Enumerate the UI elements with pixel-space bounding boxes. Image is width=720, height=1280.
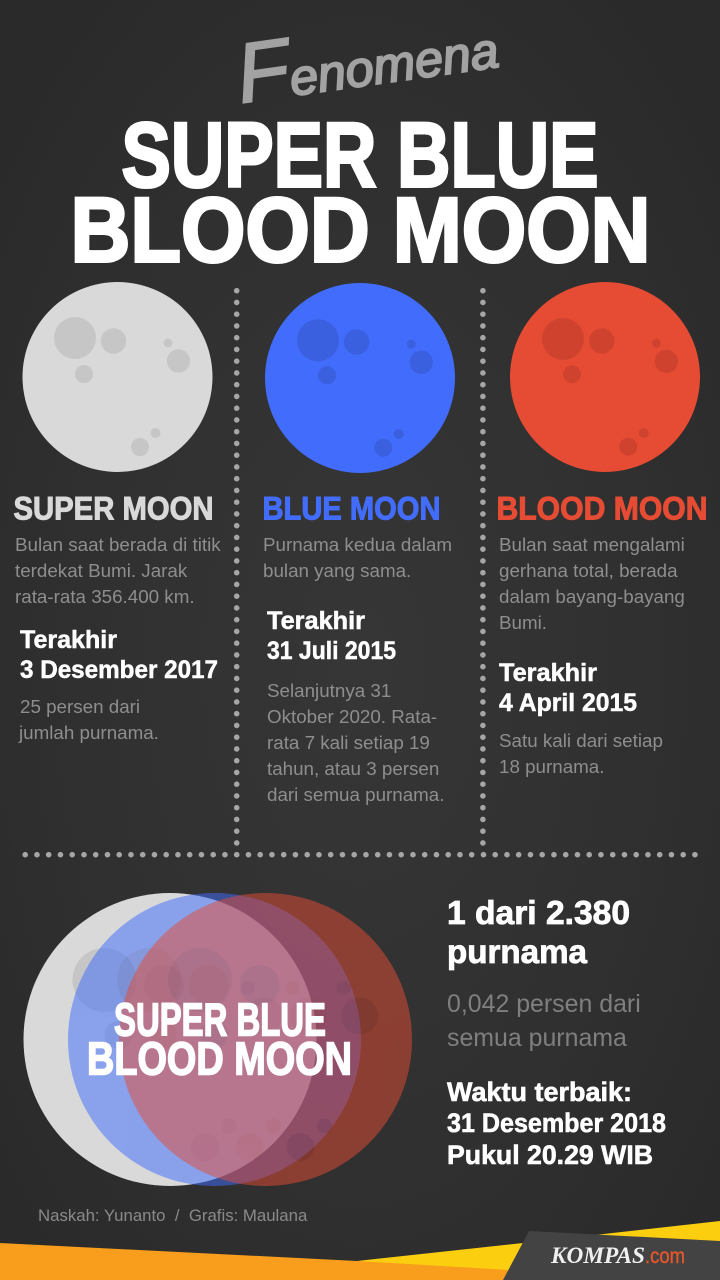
description: blue moon: bulan yang sama. (263, 560, 411, 581)
description: blood moon: gerhana total, berada (499, 560, 678, 581)
note: blood moon: Satu kali dari setiap (499, 730, 663, 751)
note: blue moon: rata 7 kali setiap 19 (267, 732, 430, 753)
credits: Naskah: Yunanto / Grafis: Maulana (38, 1206, 308, 1225)
last occurrence: blue moon: 31 Juli 2015 (267, 637, 396, 665)
text: percentage (447, 990, 641, 1052)
label: super blue blood moon: SUPER BLUE (114, 994, 326, 1046)
text: best time: Pukul 20.29 WIB (447, 1140, 653, 1170)
note: blood moon: 18 purnama. (499, 756, 604, 777)
last occurrence: super moon: Terakhir (20, 626, 117, 654)
heading: super moon: SUPER MOON (14, 490, 214, 526)
icon: super moon (22, 282, 212, 472)
description: blue moon (263, 534, 452, 581)
dotted dividers (25, 291, 698, 855)
description: blood moon (499, 534, 685, 633)
text: percentage: semua purnama (447, 1024, 627, 1052)
heading: blood moon: BLOOD MOON (496, 490, 708, 526)
icon: blood moon (510, 282, 700, 472)
logo: Kompas.com: KOMPAS (550, 1243, 645, 1268)
label: super blue blood moon: BLOOD MOON (87, 1032, 352, 1084)
text: best time: 31 Desember 2018 (447, 1108, 666, 1138)
note: blue moon: tahun, atau 3 persen (267, 758, 439, 779)
note: blue moon (267, 680, 444, 805)
last occurrence: blood moon: Terakhir (499, 659, 597, 687)
description: super moon: terdekat Bumi. Jarak (15, 560, 188, 581)
last occurrence: super moon: 3 Desember 2017 (20, 656, 218, 684)
panel: blood moon (496, 490, 708, 777)
note: blue moon: Selanjutnya 31 (267, 680, 391, 701)
text: best time: Waktu terbaik: (447, 1077, 632, 1107)
last occurrence: blood moon (499, 659, 637, 717)
note: super moon: 25 persen dari (20, 696, 140, 717)
chart: overlapping moons (24, 893, 412, 1186)
last occurrence: blood moon: 4 April 2015 (499, 689, 637, 717)
title (70, 104, 650, 282)
stat: rarity: purnama (447, 933, 588, 970)
title kicker: Fenomena: Fenomena (230, 0, 503, 121)
last occurrence: blue moon: Terakhir (267, 607, 365, 635)
overlap: red moon (119, 893, 412, 1186)
note: super moon (18, 696, 159, 743)
note: blue moon: Oktober 2020. Rata- (267, 706, 437, 727)
panel: super moon (14, 490, 221, 743)
stat: rarity (447, 894, 630, 970)
description: super moon: Bulan saat berada di titik (15, 534, 221, 555)
note: super moon: jumlah purnama. (18, 722, 159, 743)
title: SUPER BLUE (122, 104, 598, 206)
text: best time (447, 1077, 666, 1170)
last occurrence: super moon (20, 626, 218, 684)
description: blue moon: Purnama kedua dalam (263, 534, 452, 555)
icon: blue moon (265, 283, 455, 473)
panel: blue moon (262, 490, 452, 805)
note: blood moon (499, 730, 663, 777)
heading: blue moon: BLUE MOON (262, 490, 440, 526)
overlap: blue moon (68, 893, 361, 1186)
title: BLOOD MOON (70, 180, 650, 282)
text: percentage: 0,042 persen dari (447, 990, 641, 1018)
logo: Kompas.com: .com (645, 1245, 685, 1268)
description: blood moon: Bulan saat mengalami (499, 534, 685, 555)
description: super moon (15, 534, 221, 607)
description: super moon: rata-rata 356.400 km. (15, 586, 195, 607)
label: super blue blood moon (87, 994, 352, 1084)
description: blood moon: Bumi. (499, 612, 547, 633)
logo: Kompas.com (550, 1243, 685, 1268)
overlap: white moon (24, 893, 316, 1186)
stat: rarity: 1 dari 2.380 (447, 894, 630, 931)
description: blood moon: dalam bayang-bayang (499, 586, 685, 607)
note: blue moon: dari semua purnama. (267, 784, 444, 805)
last occurrence: blue moon (267, 607, 396, 665)
footer band (0, 1221, 720, 1280)
